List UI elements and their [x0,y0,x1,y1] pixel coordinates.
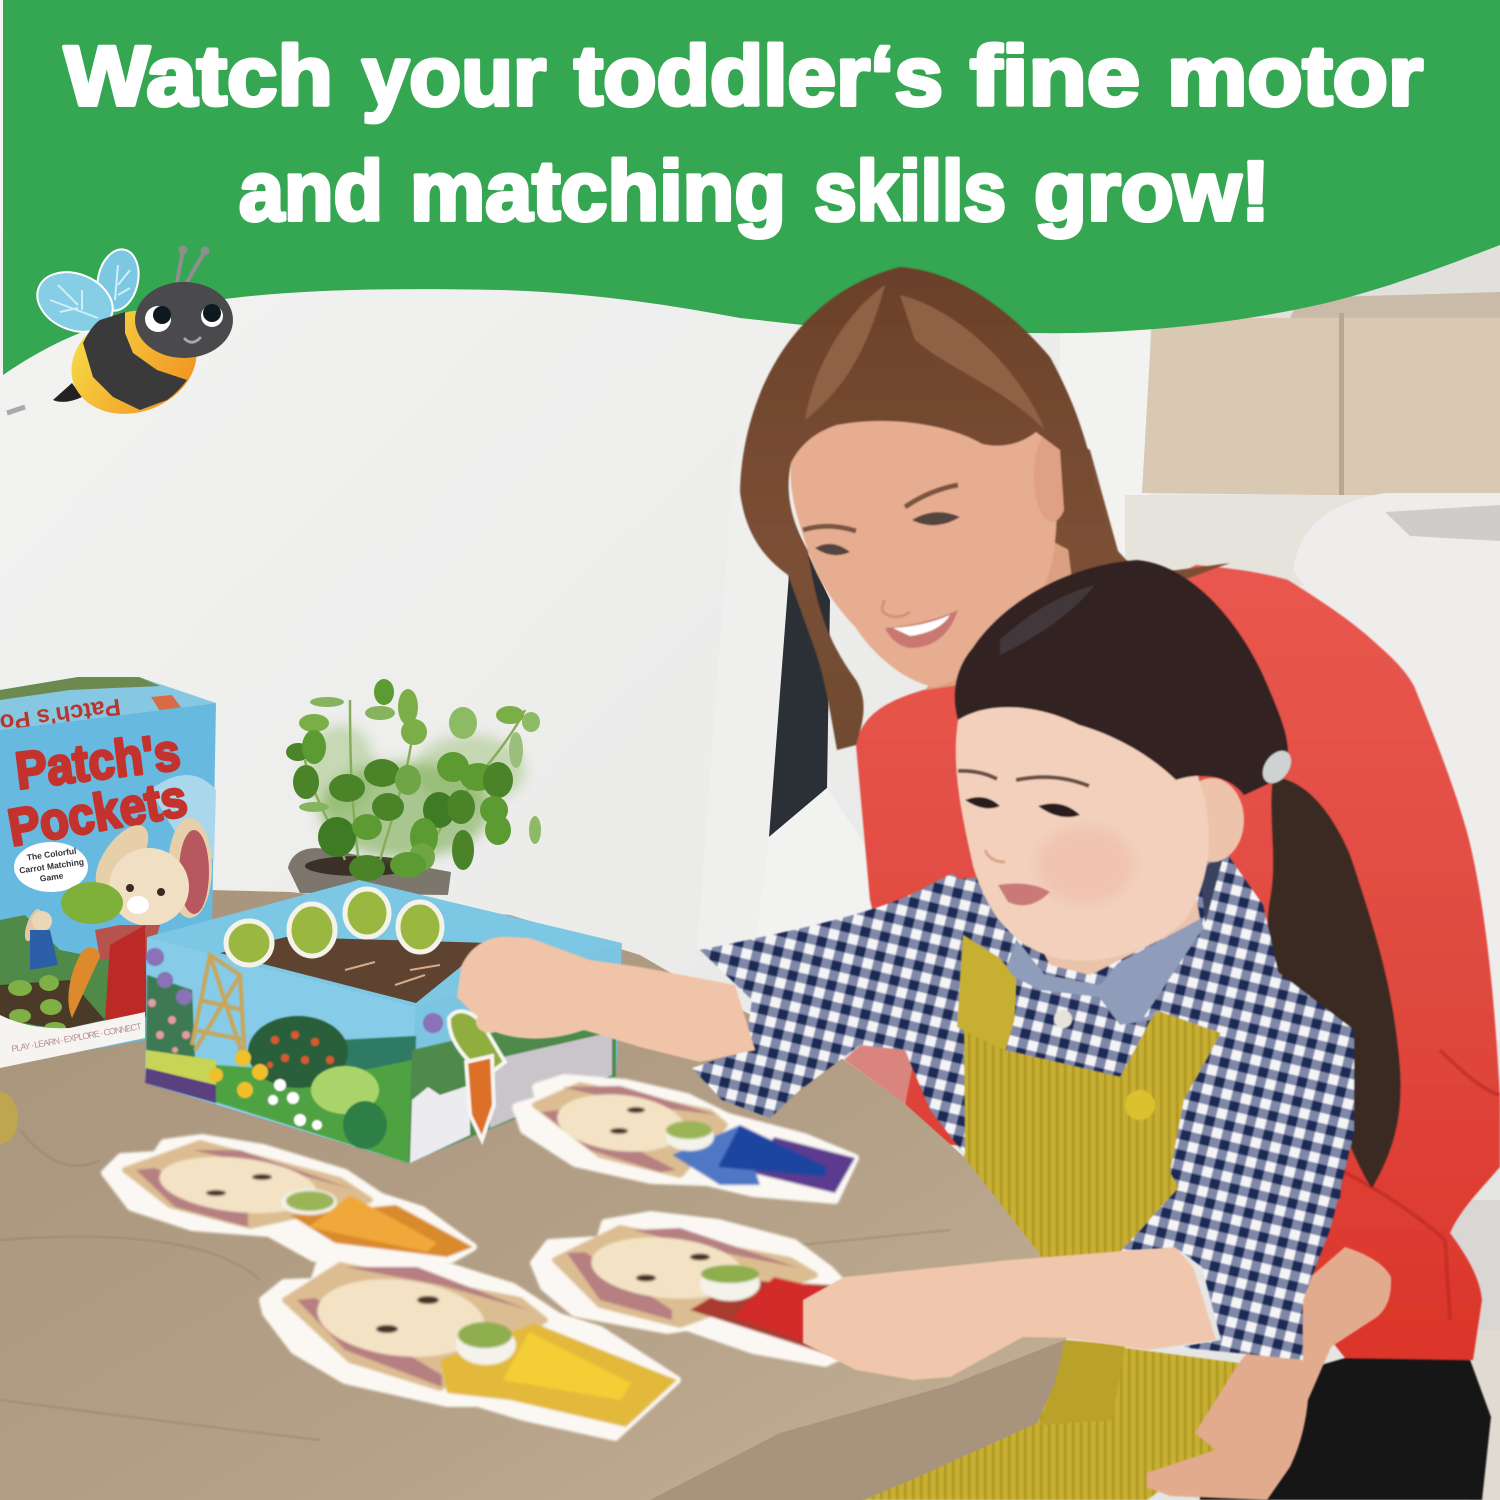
purple corner [753,1137,855,1193]
title line 2: and [239,144,383,238]
box top [0,677,216,730]
antennae [177,248,208,282]
eyes [417,1296,439,1304]
bunny card: yellow pocket [263,1253,677,1437]
gold dish at left edge [0,1092,18,1144]
leaves [456,1325,516,1365]
woman teeth [893,615,950,636]
box clouds [150,775,216,860]
ear bottom pink [297,1298,442,1387]
card base [105,1138,473,1260]
ear bottom pink [136,1168,248,1227]
fence [410,1085,470,1163]
cabbages [311,1066,379,1114]
right face purple ball [423,1013,443,1033]
far hedge [340,1036,416,1110]
title line 1: toddler‘s [574,29,943,123]
ear tan [125,1143,370,1226]
body [290,1205,473,1257]
right face foliage [408,1030,616,1163]
plant leaves [286,679,541,881]
pocket [733,1277,890,1353]
large bunny on box [85,817,212,1020]
soil sticks [345,962,440,985]
plant mass [305,725,525,858]
right ear inner [179,830,209,914]
woman face [790,395,1057,687]
woman hair highlights [805,285,1045,430]
smile [185,338,200,342]
card base [516,1078,855,1200]
body [672,1125,760,1185]
daisies [268,1079,322,1130]
bunny card: red pocket [534,1215,890,1363]
blanket under arm [844,1040,918,1105]
Patch's: Patch's [12,723,183,801]
girl cheek [1037,827,1133,903]
face [554,1088,688,1158]
box footer text: PLAY · LEARN · EXPLORE · CONNECT [11,1021,143,1054]
back wing [92,246,144,314]
head [109,848,189,926]
table top [0,890,1065,1500]
stinger [53,383,82,402]
girl body [844,560,1400,1500]
pot [288,848,451,895]
woman eyes [815,512,960,555]
armchair hollow [1385,505,1500,541]
bunny card: orange pocket [105,1138,473,1260]
purple bed [145,1068,216,1103]
girl ear [1180,778,1244,862]
girl mouth [998,884,1050,905]
title line 2: skills [814,144,1006,238]
bunny card: blue pocket [516,1078,855,1200]
floor beyond [1125,495,1500,585]
card base [534,1215,890,1363]
rose dots [148,999,190,1053]
overalls button [1125,1090,1155,1120]
plant stems [305,700,525,870]
ear tan [535,1085,725,1175]
box front [0,703,216,1066]
girl eyebrows [958,771,1089,786]
potted plant [286,679,541,895]
head [135,282,233,358]
leaves [281,1189,337,1215]
table edge band [650,1340,1065,1500]
overalls pocket flap [1040,1340,1125,1425]
cabinet seam [1339,313,1344,497]
upper shelf [1150,240,1500,320]
left ear [85,817,159,899]
ear top pink [345,1267,529,1310]
pocket [503,1332,631,1400]
armchair lower [1450,1200,1500,1330]
gingham collar right [1142,851,1278,1035]
shirt left sleeve [692,873,1016,1155]
held carrot leaves [449,1011,505,1072]
rows of plants on box [8,975,66,1034]
title line 2: grow! [1034,144,1270,238]
held carrot body [466,1056,494,1140]
eyes [126,884,134,892]
eyes [252,1174,272,1180]
upside-down title on lid: Patch's Po [0,693,122,736]
armchair [1293,493,1500,1040]
body [690,1280,885,1355]
tray right face sky [408,943,622,1163]
woman ear [1034,430,1070,522]
shirt button [1054,1010,1072,1028]
face [157,1150,319,1220]
wooden cabinets [1142,318,1500,497]
shirt torso [950,851,1354,1250]
woman hair back [1000,420,1230,660]
girl neck [1030,890,1200,975]
hair sheen [1000,585,1095,655]
woman hair [740,267,1130,750]
woman neck [925,540,1115,690]
hair tie [1257,745,1297,789]
game box [0,677,216,1068]
wall corner column [697,310,810,950]
yellow grass [146,1050,216,1085]
tray artwork [145,948,616,1163]
title line 1 [64,29,1423,123]
face [589,1231,745,1305]
ear bottom pink [541,1110,676,1172]
face [313,1271,489,1365]
speech bubble: The Colorful [26,846,77,862]
ear top pink [562,1086,717,1115]
woman trousers [1200,1357,1491,1500]
game tray [145,880,622,1163]
berry bush [248,1016,348,1088]
shirt [95,925,160,960]
ponytail [1268,777,1400,1188]
ear tan [555,1228,815,1325]
box top back strip [0,677,160,700]
Pockets: Pockets [4,769,191,858]
overalls strap over sleeve [957,935,1016,1050]
overalls [105,925,147,1020]
title line 1: fine [970,29,1140,123]
gate [490,1032,612,1128]
pocket [309,1195,437,1252]
girl hair [955,560,1288,795]
hill on box [0,915,110,1030]
leaves [666,1123,714,1151]
right forearm and hand [803,1247,1216,1380]
overalls body [860,1010,1239,1500]
woman sweater [856,565,1500,1360]
woman nose shadow [882,600,910,617]
thumb over carrot [476,1011,504,1033]
woman eyebrows [803,485,958,531]
right eye [201,304,223,327]
ear top pink [192,1150,355,1190]
right ear [168,818,212,918]
title [64,29,1423,238]
carrot [68,948,100,1018]
purple balls [146,948,192,1005]
ear bottom pink [567,1252,672,1320]
window sill [755,788,880,948]
trellis [192,955,245,1062]
sweater folds [1340,1050,1500,1320]
tray inner walls [147,880,622,1007]
eyes [627,1107,645,1113]
body dark band [83,312,187,410]
tray left face sky [145,937,416,1163]
card base [263,1253,677,1437]
pot soil [305,856,415,876]
table [0,890,1065,1500]
title line 1: Watch [64,29,333,123]
speech bubble: Game [39,870,64,884]
box footer [0,1012,145,1068]
girl nose [985,850,1005,862]
chambray collar [1004,919,1212,1025]
small bunny on box [22,907,58,970]
title line 1: motor [1167,29,1423,123]
front wing [28,261,122,343]
left forearm and hand [457,937,755,1062]
muzzle [127,896,149,914]
broccoli top [61,882,123,924]
title line 2: matching [410,144,786,238]
girl face [956,650,1209,961]
wing veins [50,265,130,318]
window dark glass [769,522,830,837]
woman mouth [885,610,958,648]
window frame [1060,300,1150,580]
body [440,1323,677,1427]
girl arms [449,873,1216,1380]
left eye [145,306,171,332]
title line 2 [239,144,1270,238]
woman arm and hand [1147,1247,1391,1500]
carrot tops in tray [226,889,442,965]
shirt right sleeve [1124,1030,1354,1360]
speech bubble [14,842,88,892]
girl eyes [965,797,1080,817]
badge on lid [151,695,182,711]
green header banner [3,0,1500,375]
bee mascot [7,246,233,431]
berries [267,1031,334,1068]
rose bush [146,975,195,1060]
floor lower right [1470,1330,1500,1500]
tray soil [220,937,490,1003]
eyes [690,1254,710,1260]
speech bubble: Carrot Matching [19,857,85,876]
woman [740,267,1500,1500]
ear top pink [633,1228,799,1268]
daffodils [209,1050,268,1098]
pocket [718,1125,827,1177]
body [57,293,211,431]
wood grain [0,1130,950,1440]
overalls upper left strap [963,929,1016,1050]
big leaf [343,1101,387,1149]
box title [4,723,191,858]
title line 1: your [362,29,546,123]
foreground bushes [210,1060,412,1163]
soil on box [0,980,105,1030]
flight trail [7,407,25,413]
collar inner dark [1200,851,1240,922]
ear tan [285,1265,545,1388]
leaves [700,1267,760,1301]
